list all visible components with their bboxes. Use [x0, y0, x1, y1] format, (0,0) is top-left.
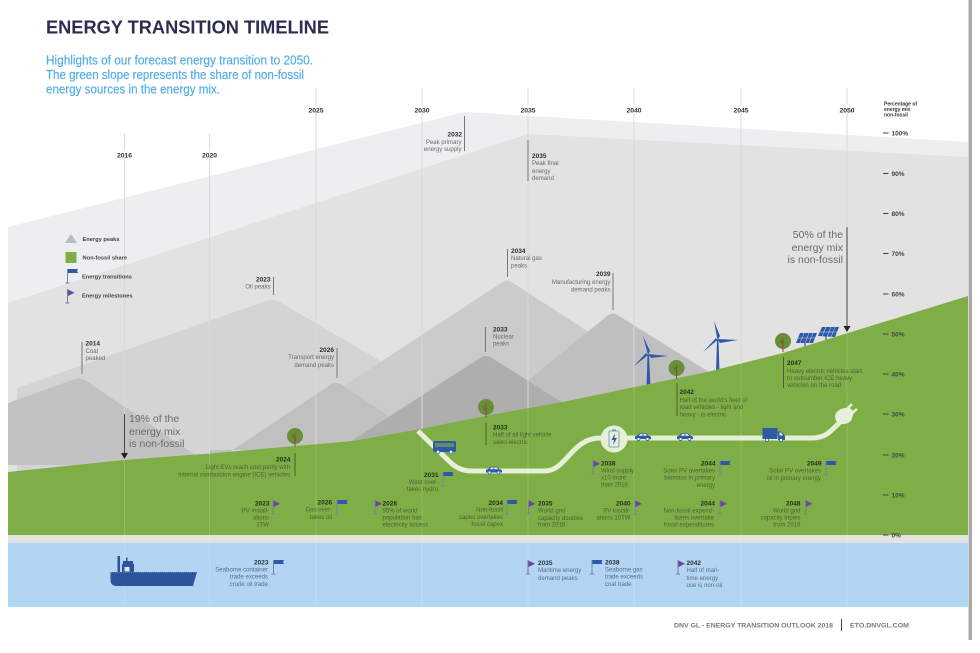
label: 2033 half of light vehicles electric: 2033	[493, 424, 508, 432]
label: 2032 peak primary energy supply: energy supply	[424, 147, 462, 153]
callout: 50% non-fossil	[788, 227, 850, 332]
milestone: 2040 PV installations 10TW: ations 10TW	[597, 516, 631, 522]
label: 2034 natural gas peaks	[508, 248, 542, 277]
milestone: 2040 PV installations 10TW: 2040	[616, 500, 631, 508]
percentage scale: Percentage of	[884, 102, 917, 108]
percentage scale: 0%	[892, 532, 901, 540]
percentage scale: non-fossil	[884, 112, 908, 118]
milestone: 2038 wind supply	[591, 460, 635, 488]
milestone: 2048 world grid capacity triples: 2048	[786, 500, 801, 508]
callout: 50% non-fossil: is non-fossil	[788, 254, 843, 266]
footer: DNV GL - ENERGY TRANSITION OUTLOOK 2018	[674, 622, 834, 630]
milestone: 2042 half of maritime energy non-oil	[676, 560, 722, 589]
transition: 2023 seaborne container trade: 2023	[254, 560, 269, 566]
label: 2042 half of road vehicles electric: road vehicles - light and	[680, 405, 743, 411]
milestone: 2028 electricity access: 2028	[382, 500, 397, 508]
transition: 2038 seaborne gas trade: Seaborne gas	[605, 568, 643, 574]
callout: 50% non-fossil: energy mix	[792, 242, 844, 254]
background layer: final energy demand	[8, 134, 968, 607]
label: 2047 heavy electric vehicles: to outnumber ICE heavy	[787, 376, 853, 382]
label: 2034 natural gas peaks: Natural gas	[511, 256, 542, 262]
year labels: 2025	[308, 108, 324, 114]
label: 2033 nuclear peaks	[486, 326, 514, 352]
milestone: 2028 electricity access: electricity access	[382, 522, 428, 528]
milestone: 2048 world grid capacity triples: capacity triples	[760, 516, 800, 522]
label: 2032 peak primary energy supply: Peak primary	[426, 140, 462, 146]
label: 2034 natural gas peaks: peaks	[511, 264, 527, 270]
transition: 2026 gas overtakes oil: Gas over-	[305, 508, 332, 514]
label: 2014 coal peaked	[82, 340, 105, 374]
milestone: 2040 PV installations 10TW: PV install-	[603, 508, 630, 514]
blue band: maritime	[8, 543, 968, 607]
label: 2035 peak final energy demand	[528, 140, 559, 182]
transition: 2031 wind overtakes hydro	[407, 472, 454, 493]
mountain: nuclear peak	[345, 356, 590, 460]
milestone: 2035 maritime energy demand peaks: 2035	[538, 560, 553, 567]
percentage scale: 80%	[892, 211, 905, 218]
milestone: 2035 world grid capacity doubles: from 2016	[538, 522, 566, 528]
subtitle: energy sources in the energy mix.	[46, 82, 220, 96]
milestone: 2048 world grid capacity triples: World grid	[773, 508, 800, 514]
transition: 2026 gas overtakes oil: 2026	[318, 500, 332, 506]
label: 2035 peak final energy demand: demand	[532, 176, 554, 182]
transition: 2044 solar PV overtakes biomass: 2044	[701, 460, 716, 468]
transition: 2034 non-fossil capex: 2034	[489, 500, 503, 507]
label: 2024 light EVs: Light EVs reach cost parity with	[206, 465, 290, 471]
milestone: 2038 wind supply: Wind supply	[601, 468, 635, 474]
label: 2033 nuclear peaks: peaks	[493, 342, 509, 348]
label: 2047 heavy electric vehicles	[784, 357, 862, 389]
transition: 2038 seaborne gas trade: coal trade	[605, 582, 632, 588]
transition: 2044 solar PV overtakes biomass	[663, 460, 730, 489]
icon: bus	[433, 441, 456, 454]
callout: 19% non-fossil: is non-fossil	[129, 438, 184, 450]
milestone: 2035 world grid capacity doubles: capacity doubles	[538, 516, 583, 522]
green slope labels	[178, 357, 862, 528]
milestone: 2035 maritime energy demand peaks	[526, 560, 582, 582]
label: 2042 half of road vehicles electric	[677, 383, 748, 418]
milestone: 2028 electricity access	[373, 500, 428, 528]
trees	[287, 333, 791, 447]
label: 2033 nuclear peaks: Nuclear	[493, 334, 514, 340]
transition: 2038 seaborne gas trade: 2038	[605, 560, 620, 566]
milestone: 2023 PV installations: 2023	[255, 500, 270, 508]
percentage scale: 70%	[892, 251, 905, 258]
percentage scale: 60%	[892, 292, 905, 298]
year labels: 2030	[414, 108, 430, 114]
percentage scale: 10%	[892, 492, 905, 500]
legend: Energy transitions	[82, 274, 132, 280]
transition: 2044 solar PV overtakes biomass: energy	[696, 483, 716, 489]
label: 2014 coal peaked: 2014	[86, 340, 100, 348]
milestone: 2023 PV installations	[242, 500, 280, 528]
mountain: coal peak	[8, 378, 210, 465]
milestone: 2038 wind supply: x10 more	[601, 476, 627, 482]
mountain: manufacturing energy peak	[510, 314, 730, 430]
label: 2035 peak final energy demand: energy	[532, 169, 551, 175]
label: 2033 nuclear peaks: 2033	[493, 326, 508, 334]
label: 2026 transport energy demand peaks	[288, 347, 337, 378]
milestone: 2038 wind supply: 2038	[601, 460, 616, 468]
milestone: 2028 electricity access: 95% of world	[382, 508, 417, 514]
label: 2039 manufacturing energy demand peaks: Manufacturing energy	[552, 280, 611, 286]
label: 2014 coal peaked: Coal	[86, 349, 98, 355]
milestone: 2035 world grid capacity doubles: World grid	[538, 508, 565, 514]
label: 2023 oil peaks: Oil peaks	[245, 284, 270, 290]
milestone: 2040 PV installations 10TW	[597, 500, 642, 522]
transition: 2034 non-fossil capex: fossil capex	[471, 522, 503, 528]
subtitle: The green slope represents the share of non-fossil	[46, 68, 304, 82]
legend: Non-fossil share	[82, 256, 127, 262]
milestone: 2044 non-fossil expenditures	[664, 500, 727, 528]
milestone: 2044 non-fossil expenditures: itures overtake	[674, 516, 715, 522]
label: 2023 oil peaks: 2023	[256, 276, 271, 284]
percentage scale: 20%	[892, 452, 905, 460]
transition: 2031 wind overtakes hydro: Wind over-	[409, 480, 438, 486]
percentage scale: 40%	[892, 372, 905, 378]
mountain: transport energy demand peak	[210, 383, 440, 465]
year gridlines	[124, 88, 847, 607]
label: 2033 half of light vehicles electric: sales electric	[493, 440, 528, 446]
callout: 19% non-fossil: energy mix	[129, 426, 181, 438]
label: 2047 heavy electric vehicles: 2047	[787, 360, 802, 367]
legend: Energy peaks	[82, 237, 120, 243]
milestone: 2028 electricity access: population has	[382, 516, 422, 522]
percentage scale: 50%	[892, 332, 905, 338]
label: 2042 half of road vehicles electric: heavy - is electric	[680, 412, 726, 418]
maritime labels	[215, 560, 722, 589]
legend	[65, 234, 133, 303]
label: 2034 natural gas peaks: 2034	[511, 248, 526, 255]
milestone: 2023 PV installations: ations	[253, 516, 269, 522]
transition: 2044 solar PV overtakes biomass: Solar PV overtakes	[663, 468, 715, 474]
year labels: 2035	[520, 108, 536, 114]
callout: 50% non-fossil: 50% of the	[793, 229, 843, 241]
transition: 2023 seaborne container trade: Seaborne container	[215, 568, 268, 574]
icon: truck	[762, 428, 785, 442]
title: ENERGY TRANSITION TIMELINE	[46, 16, 329, 38]
label: 2026 transport energy demand peaks: demand peaks	[294, 363, 334, 369]
transition: 2023 seaborne container trade: trade exceeds	[230, 574, 268, 580]
label: 2039 manufacturing energy demand peaks: demand peaks	[571, 288, 610, 294]
transition: 2023 seaborne container trade	[215, 560, 284, 588]
percentage scale	[883, 102, 917, 540]
label: 2024 light EVs	[178, 453, 295, 478]
callout: 19% non-fossil	[121, 413, 184, 459]
milestone: 2044 non-fossil expenditures: Non-fossil expend-	[664, 508, 714, 514]
label: 2039 manufacturing energy demand peaks: 2039	[596, 271, 611, 278]
label: 2035 peak final energy demand: Peak final	[532, 161, 559, 167]
percentage scale: 100%	[892, 130, 908, 138]
transition: 2049 solar PV overtakes oil: 2049	[807, 460, 822, 468]
year labels	[116, 105, 856, 160]
label: 2024 light EVs: internal combustion engine (ICE) vehicles	[178, 472, 290, 478]
transition: 2031 wind overtakes hydro: takes hydro	[407, 487, 439, 493]
label: 2032 peak primary energy supply: 2032	[448, 132, 462, 138]
footer	[674, 619, 909, 631]
milestone: 2042 half of maritime energy non-oil: 2042	[686, 560, 701, 567]
label: 2047 heavy electric vehicles: Heavy electric vehicles start	[787, 369, 862, 375]
transition: 2034 non-fossil capex: capex overtakes	[459, 515, 503, 521]
icon: container ship	[110, 556, 197, 586]
transition: 2049 solar PV overtakes oil: Solar PV overtakes	[769, 468, 821, 474]
label: 2014 coal peaked: peaked	[86, 356, 105, 362]
year labels: 2040	[626, 108, 642, 114]
subtitle: Highlights of our forecast energy transition to 2050.	[46, 54, 313, 68]
percentage scale: 30%	[892, 412, 905, 418]
footer: ETO.DNVGL.COM	[850, 622, 909, 630]
mountain: oil peak	[17, 300, 420, 480]
year labels: 2050	[839, 108, 855, 114]
milestone: 2035 world grid capacity doubles: 2035	[538, 500, 553, 508]
transition: 2038 seaborne gas trade	[590, 560, 643, 588]
percentage scale: 90%	[892, 171, 905, 178]
transition: 2026 gas overtakes oil: takes oil	[310, 515, 332, 521]
icon: battery	[600, 426, 628, 452]
solar panels	[796, 327, 839, 348]
transition: 2026 gas overtakes oil	[305, 500, 348, 521]
label: 2026 transport energy demand peaks: Transport energy	[288, 355, 335, 361]
label: 2024 light EVs: 2024	[276, 456, 291, 464]
label: 2042 half of road vehicles electric: Half of the world's fleet of	[680, 398, 748, 404]
wind turbines	[633, 321, 738, 387]
milestone: 2048 world grid capacity triples	[760, 500, 812, 528]
percentage scale: energy mix	[884, 107, 911, 113]
label: 2032 peak primary energy supply	[424, 116, 464, 153]
transition: 2049 solar PV overtakes oil: oil in primary energy	[767, 476, 822, 482]
milestone: 2044 non-fossil expenditures: fossil expenditures	[664, 522, 714, 528]
legend: Energy milestones	[82, 294, 133, 300]
milestone: 2035 maritime energy demand peaks: Maritime energy	[538, 568, 582, 574]
label: 2033 half of light vehicles electric	[486, 423, 552, 446]
label: 2047 heavy electric vehicles: vehicles on the road	[787, 383, 841, 389]
milestone: 2044 non-fossil expenditures: 2044	[701, 500, 715, 508]
milestone: 2035 maritime energy demand peaks: demand peaks	[538, 576, 578, 582]
mountain: natural gas peak	[330, 281, 640, 470]
label: 2039 manufacturing energy demand peaks	[552, 271, 613, 310]
year labels: 2045	[733, 108, 749, 114]
green slope: non-fossil share	[8, 296, 968, 535]
milestone: 2048 world grid capacity triples: from 2016	[773, 522, 801, 528]
background layer: primary energy supply	[8, 112, 968, 607]
year labels: 2016	[117, 152, 132, 160]
year labels: 2020	[202, 152, 217, 160]
milestone: 2035 world grid capacity doubles	[526, 500, 583, 528]
callout: 19% non-fossil: 19% of the	[129, 413, 179, 425]
label: 2023 oil peaks	[245, 276, 274, 295]
road with plug	[418, 404, 857, 471]
milestone: 2042 half of maritime energy non-oil: Half of mari-	[686, 568, 719, 574]
milestone: 2038 wind supply: than 2016	[601, 482, 629, 488]
milestone: 2023 PV installations: PV install-	[242, 508, 269, 514]
milestone: 2023 PV installations: 1TW	[256, 522, 269, 528]
label: 2035 peak final energy demand: 2035	[532, 153, 547, 160]
transition: 2023 seaborne container trade: crude oil trade	[230, 582, 269, 588]
transition: 2049 solar PV overtakes oil	[767, 460, 836, 482]
label: 2033 half of light vehicles electric: Half of all light vehicle	[493, 432, 552, 438]
icon: cars	[486, 433, 693, 474]
grey base stripe	[8, 535, 968, 543]
transition: 2031 wind overtakes hydro: 2031	[424, 472, 439, 479]
label: 2042 half of road vehicles electric: 2042	[680, 389, 694, 396]
milestone: 2042 half of maritime energy non-oil: use is non-oil	[686, 583, 722, 589]
milestone: 2042 half of maritime energy non-oil: time energy	[686, 576, 719, 582]
transition: 2044 solar PV overtakes biomass: biomass in primary	[664, 476, 716, 482]
transition: 2034 non-fossil capex: Non-fossil	[476, 508, 503, 514]
right edge bar	[968, 0, 972, 640]
label: 2026 transport energy demand peaks: 2026	[320, 347, 334, 354]
transition: 2034 non-fossil capex	[459, 500, 518, 528]
transition: 2038 seaborne gas trade: trade exceeds	[605, 574, 643, 580]
